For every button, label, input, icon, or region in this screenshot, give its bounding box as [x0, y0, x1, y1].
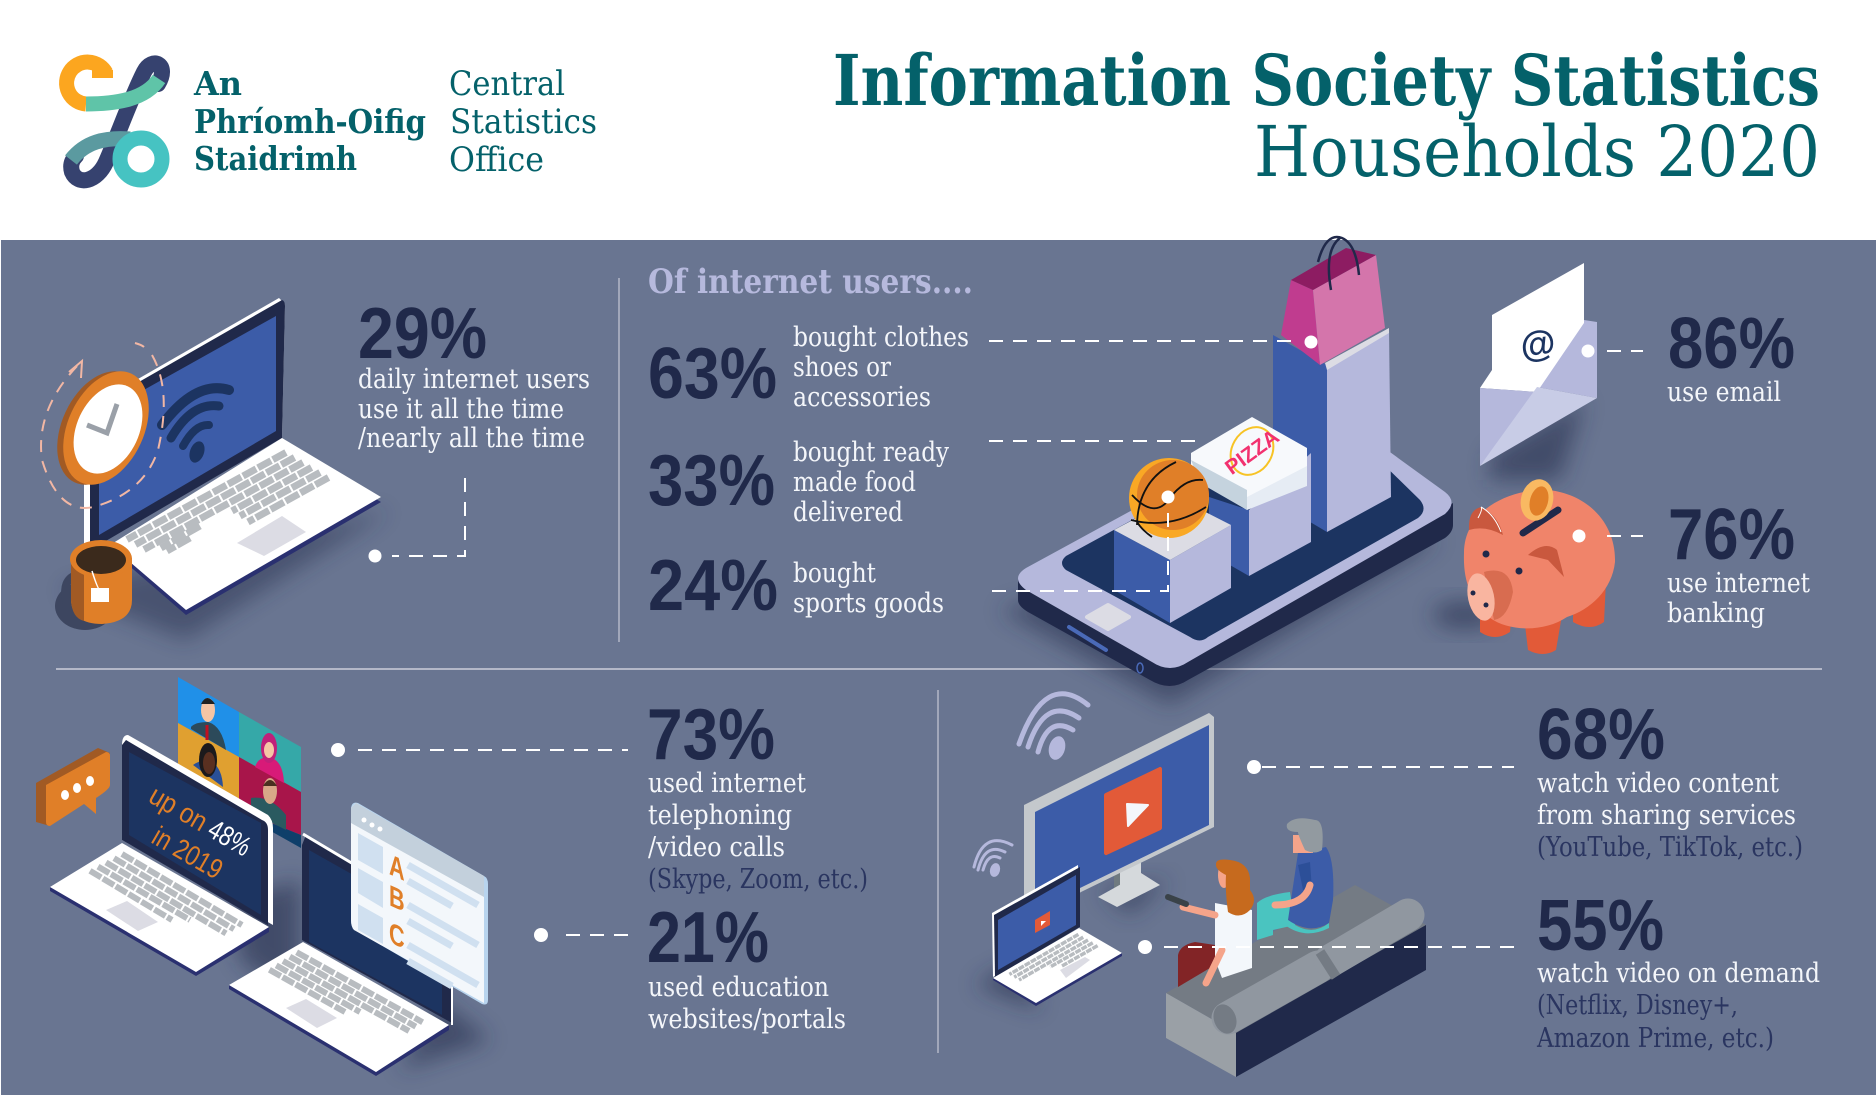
laptop base and keyboard — [110, 438, 381, 615]
tall bar with bag — [1273, 328, 1391, 532]
icon: clock with dashed arrows — [40, 343, 166, 508]
stat: 63% clothes: 63% — [648, 334, 777, 414]
stat: 86% use email: 86% — [1668, 304, 1795, 384]
stat: 73% telephoning: 73% — [647, 695, 775, 775]
laptop screen — [84, 298, 285, 546]
title — [833, 39, 1820, 193]
icon: basketball — [1129, 458, 1209, 538]
pig body — [1464, 490, 1615, 628]
stat: 73% telephoning — [647, 695, 868, 895]
stat: 76% internet banking — [1667, 495, 1810, 629]
stat: 73% telephoning: telephoning — [648, 800, 792, 831]
icon: mug with teabag — [55, 540, 132, 630]
logo text: English name: Office — [449, 140, 544, 180]
stat: 21% education — [647, 898, 846, 1035]
illustration: laptop with clock and mug — [40, 298, 390, 640]
connector: video calls — [331, 743, 628, 757]
phone body — [1018, 405, 1453, 686]
logo text: Irish name — [193, 64, 426, 178]
stat: 86% use email — [1667, 304, 1795, 408]
stat: 55% video on demand: Amazon Prime, etc.) — [1536, 1023, 1774, 1054]
small bar — [1114, 497, 1231, 623]
panel: main background — [1, 240, 1876, 1095]
middle bar — [1209, 453, 1311, 576]
stat: 29% daily internet users: /nearly all the time — [358, 423, 585, 454]
laptop: up on 48%: 48% — [203, 813, 256, 862]
connector: education — [534, 928, 628, 942]
laptop: up on 48% — [50, 735, 273, 976]
stat: 21% education: websites/portals — [648, 1004, 846, 1035]
stat: 33% food: 33% — [648, 441, 775, 521]
pig legs — [1480, 560, 1607, 654]
web page panel — [351, 803, 488, 1004]
stat: 73% telephoning: (Skype, Zoom, etc.) — [648, 864, 868, 895]
stat: 73% telephoning: /video calls — [648, 832, 785, 863]
stat: 33% food: delivered — [793, 497, 903, 528]
icon: wifi large — [1019, 694, 1088, 762]
stat: 29% daily internet users — [358, 294, 590, 454]
icon: shopping bag — [1281, 237, 1385, 365]
stat: 21% education: 21% — [647, 898, 769, 978]
laptop: education portal — [229, 834, 452, 1076]
heading: of internet users: Of internet users.... — [648, 262, 973, 302]
illustration: video call and education laptops — [36, 677, 490, 1076]
stat: 68% sharing services: (YouTube, TikTok, etc.) — [1537, 832, 1803, 863]
connector: video sharing — [1247, 760, 1514, 774]
web page panel: B — [389, 878, 405, 919]
laptop: up on 48%: up on — [144, 779, 213, 837]
pig ears — [1469, 507, 1503, 535]
logo text: Irish name: Phríomh-Oifig — [194, 102, 426, 141]
sofa — [1166, 885, 1426, 1077]
logo text: English name — [449, 64, 597, 180]
stat: 24% sports goods: sports goods — [793, 588, 944, 619]
logo text: English name: Central — [449, 64, 565, 104]
title: Households 2020 — [1254, 111, 1820, 193]
logo text: Irish name: An — [193, 64, 242, 103]
connectors: shop items — [989, 336, 1318, 591]
logo — [67, 62, 597, 180]
icon: email envelope — [1480, 263, 1643, 480]
person: man with grey hair — [1257, 818, 1333, 940]
logo text: English name: Statistics — [450, 102, 597, 142]
icon: logo mark — [67, 62, 162, 180]
icon: wifi small — [974, 841, 1012, 878]
television — [1024, 713, 1214, 930]
stat: 68% sharing services: watch video content — [1537, 768, 1779, 799]
logo text: Irish name: Staidrimh — [194, 139, 357, 178]
connector: video on demand — [1138, 940, 1514, 954]
stat: 55% video on demand: (Netflix, Disney+, — [1537, 990, 1738, 1021]
stat: 55% video on demand: 55% — [1537, 886, 1664, 966]
stat: 63% clothes: bought clothes — [793, 322, 969, 353]
divider lines — [56, 278, 1822, 1053]
stat: 76% internet banking: banking — [1667, 598, 1765, 629]
icon: email envelope: @ — [1518, 321, 1558, 366]
stat: 33% food: made food — [793, 467, 916, 498]
stat: 68% sharing services: 68% — [1537, 695, 1665, 775]
stat: 24% sports goods: 24% — [648, 546, 778, 626]
person: woman with remote — [1168, 860, 1254, 987]
stat: 29% daily internet users: daily internet users — [358, 364, 590, 395]
icon: wifi on screen — [162, 388, 229, 465]
stat: 73% telephoning: used internet — [648, 768, 806, 799]
coin and slot — [1523, 510, 1558, 533]
stat: 86% use email: use email — [1667, 377, 1781, 408]
illustration: people watching TV — [974, 694, 1426, 1077]
stat: 21% education: used education — [648, 972, 829, 1003]
web page panel: C — [389, 915, 405, 956]
connector: 29% to laptop — [368, 478, 465, 562]
stat: 68% sharing services — [1537, 695, 1803, 863]
stat: 33% food — [648, 437, 950, 528]
stat: 76% internet banking: 76% — [1668, 495, 1795, 575]
icon: speech bubble — [36, 748, 110, 826]
stat: 29% daily internet users: 29% — [358, 294, 487, 374]
stat: 29% daily internet users: use it all the time — [358, 394, 564, 425]
web page panel: A — [389, 847, 405, 888]
video call grid — [178, 677, 301, 848]
stat: 63% clothes: shoes or — [793, 352, 891, 383]
icon: pizza box: PIZZA — [1221, 425, 1284, 480]
stat: 55% video on demand — [1536, 886, 1820, 1054]
laptop small — [975, 865, 1122, 1010]
laptop: up on 48%: in 2019 — [147, 820, 228, 885]
illustration: smartphone shop — [1000, 237, 1453, 705]
icon: pizza box — [1191, 417, 1307, 510]
stat: 63% clothes: accessories — [793, 382, 931, 413]
pig snout — [1484, 571, 1513, 620]
stat: 24% sports goods — [648, 546, 944, 626]
stat: 55% video on demand: watch video on demand — [1537, 958, 1820, 989]
stat: 76% internet banking: use internet — [1667, 568, 1810, 599]
stat: 24% sports goods: bought — [793, 558, 876, 589]
icon: piggy bank — [1433, 476, 1643, 654]
stat: 33% food: bought ready — [793, 437, 950, 468]
stat: 63% clothes — [648, 322, 969, 414]
stat: 68% sharing services: from sharing services — [1537, 800, 1796, 831]
